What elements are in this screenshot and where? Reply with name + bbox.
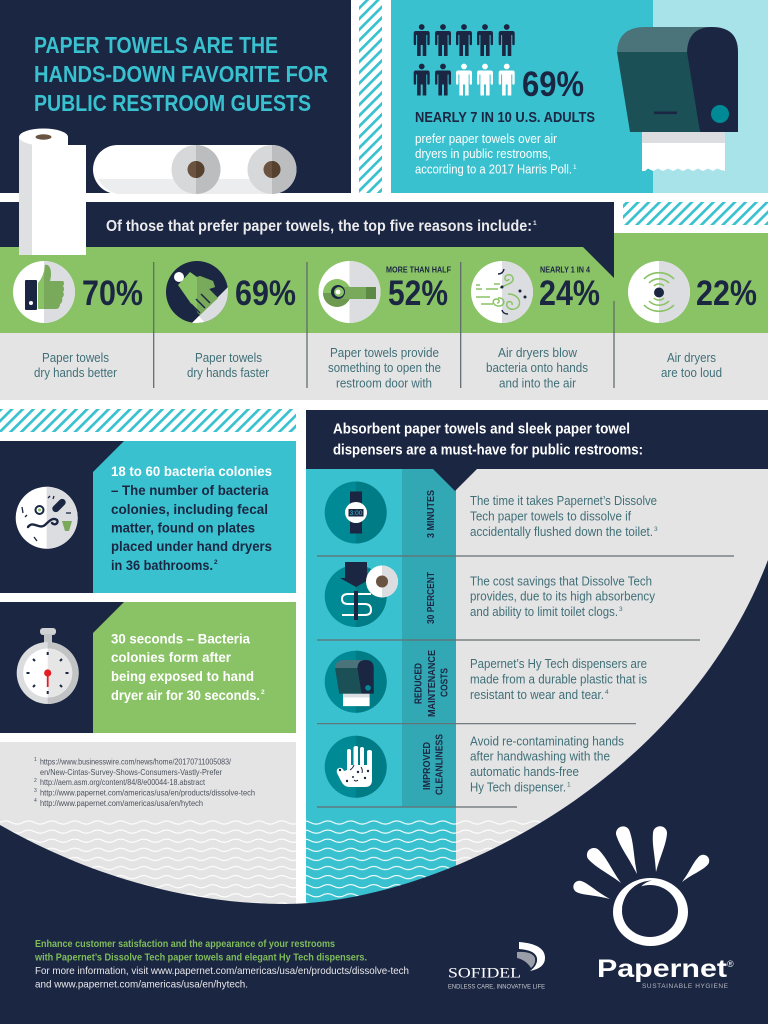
text block: sources: 3	[34, 788, 37, 794]
heading	[34, 32, 328, 116]
logo: Sofidel	[448, 942, 546, 990]
text block: Hy Tech dispenser.	[470, 780, 566, 794]
label: NEARLY 1 IN 4	[540, 265, 590, 275]
panel: thirty seconds	[0, 602, 296, 733]
text block: after handwashing with the	[470, 748, 610, 764]
logo: Papernet	[572, 824, 734, 990]
caption: and into the air	[499, 376, 577, 390]
caption	[328, 345, 441, 390]
reason 3: door handle	[318, 261, 451, 390]
text block	[470, 734, 624, 794]
text block: 1	[567, 782, 571, 788]
panel: product benefits	[306, 410, 768, 914]
heading: HANDS-DOWN FAVORITE FOR	[34, 61, 328, 87]
text block: Papernet’s Hy Tech dispensers are	[470, 656, 647, 671]
statistic: 22%: 22%	[696, 274, 757, 313]
text block: sources: http://www.papernet.com/americas/usa/en/hytech	[40, 798, 203, 808]
caption	[486, 345, 588, 390]
label	[421, 734, 446, 795]
caption: Air dryers blow	[498, 345, 577, 360]
text block: automatic hands-free	[470, 764, 579, 779]
icon: air and bacteria	[471, 261, 533, 323]
heading: PUBLIC RESTROOM GUESTS	[34, 90, 311, 116]
caption	[34, 350, 118, 380]
text block: sources: https://www.businesswire.com/news/home/20170711005083/	[40, 756, 231, 766]
text block: The cost savings that Dissolve Tech	[470, 574, 652, 588]
icon: thumbs up	[13, 261, 75, 323]
icon: people pictogram	[414, 24, 515, 96]
row: reduced maintenance costs	[325, 650, 647, 717]
caption: restroom door with	[336, 376, 432, 390]
statistic: 24%: 24%	[539, 274, 600, 313]
text block: resistant to wear and tear.	[470, 687, 604, 702]
icon: bacteria petri dish	[16, 487, 78, 549]
text block: 2	[214, 559, 218, 566]
label: MORE THAN HALF	[386, 265, 451, 275]
text block: provides, due to its high absorbency	[470, 589, 655, 604]
decorative stripe block	[623, 202, 768, 225]
caption: dry hands better	[34, 365, 118, 380]
text block: according to a 2017 Harris Poll.	[415, 162, 572, 176]
icon: toilet pipe and roll	[325, 562, 398, 627]
dividers	[154, 262, 614, 388]
panel: 69 percent statistic	[391, 0, 768, 193]
statistic: 69%: 69%	[522, 65, 584, 104]
text block: Tech paper towels to dissolve if	[470, 508, 631, 524]
panel: reasons heading banner	[0, 202, 614, 278]
caption: dry hands faster	[187, 365, 270, 380]
statistic: 52%: 52%	[388, 274, 448, 313]
text block: prefer paper towels over air	[415, 131, 558, 146]
text block: in 36 bathrooms.	[111, 558, 213, 574]
text block: 4	[605, 689, 609, 696]
text block: sources: en/New-Cintas-Survey-Shows-Consumers-Vastly-Prefer	[40, 767, 222, 777]
text block: dryers in public restrooms,	[415, 146, 551, 161]
icon: paper roll upright	[19, 128, 86, 255]
reason 1: dry better	[13, 261, 143, 380]
icon: wristwatch: 3:00	[350, 510, 363, 517]
caption: Paper towels provide	[330, 345, 439, 360]
text block	[470, 574, 655, 619]
text block: The time it takes Papernet’s Dissolve	[470, 493, 657, 508]
text block: accidentally flushed down the toilet.	[470, 524, 653, 539]
icon: hand with germs	[325, 736, 387, 798]
caption: something to open the	[328, 360, 441, 375]
text block: and ability to limit toilet clogs.	[470, 604, 618, 619]
text block: placed under hand dryers	[111, 539, 272, 555]
panel: navy footer curve	[0, 560, 768, 1024]
text block: matter, found on plates	[111, 520, 255, 536]
subheading: NEARLY 7 IN 10 U.S. ADULTS	[415, 109, 595, 126]
text block	[470, 493, 658, 539]
statistic: 69%: 69%	[235, 274, 296, 313]
text block: 3	[619, 606, 623, 613]
text block: sources: http://www.papernet.com/americas/usa/en/products/dissolve-tech	[40, 788, 255, 798]
panel: references	[0, 742, 296, 912]
logo: Sofidel: SOFIDEL	[448, 966, 521, 982]
text block: sources: 1	[34, 757, 37, 763]
text block: colonies form after	[111, 650, 231, 666]
icon: handshake	[166, 261, 228, 323]
text block: sources: http://aem.asm.org/content/84/8/e00044-18.abstract	[40, 777, 206, 787]
text block	[111, 632, 265, 704]
row: improved cleanliness	[325, 734, 624, 798]
footer text: and www.papernet.com/americas/usa/en/hytech.	[35, 978, 248, 990]
text block: colonies, including fecal	[111, 502, 268, 518]
heading: Of those that prefer paper towels, the top five reasons include:	[106, 218, 532, 235]
reason 2: dry faster	[166, 261, 296, 380]
logo: Papernet: ®	[727, 959, 734, 969]
icon: door handle	[318, 261, 380, 323]
panel: green statistic band	[0, 233, 768, 400]
footer text: with Papernet’s Dissolve Tech paper towels and elegant Hy Tech dispensers.	[34, 952, 367, 964]
label: CLEANLINESS	[434, 734, 446, 795]
label: IMPROVED	[421, 742, 433, 790]
caption	[661, 350, 722, 380]
label: 30 PERCENT	[425, 572, 437, 624]
text block: 30 seconds – Bacteria	[111, 632, 250, 648]
caption: Air dryers	[667, 350, 716, 365]
caption	[187, 350, 270, 380]
text block: Avoid re-contaminating hands	[470, 734, 624, 748]
text block: being exposed to hand	[111, 669, 254, 685]
text block: 1	[573, 164, 577, 171]
decorative stripe column	[359, 0, 382, 193]
panel: reasons heading banner: 1	[533, 220, 537, 227]
heading: PAPER TOWELS ARE THE	[34, 32, 278, 58]
icon: stopwatch	[17, 628, 79, 704]
reason 5: too loud	[628, 261, 757, 380]
icon: ring and drops	[572, 824, 712, 946]
text block	[111, 464, 272, 574]
panel: title block	[0, 0, 351, 193]
text block: sources: 4	[34, 798, 37, 804]
logo: Sofidel: ENDLESS CARE, INNOVATIVE LIFE	[448, 984, 546, 990]
statistic: 70%: 70%	[82, 274, 143, 313]
footer text: Enhance customer satisfaction and the appearance of your restrooms	[35, 938, 335, 950]
text block: 18 to 60 bacteria colonies	[111, 464, 272, 480]
caption: Paper towels	[195, 350, 262, 365]
panel: bacteria colonies	[0, 441, 296, 593]
text block	[415, 131, 577, 176]
logo: Papernet: SUSTAINABLE HYGIENE	[642, 983, 729, 990]
text block: sources	[34, 756, 255, 808]
text block: – The number of bacteria	[111, 483, 269, 499]
label: REDUCED	[413, 663, 425, 704]
icon: sound waves	[628, 261, 690, 323]
text block: 3	[654, 526, 658, 533]
caption: are too loud	[661, 365, 722, 380]
text block: sources: 2	[34, 778, 37, 784]
text block: dryer air for 30 seconds.	[111, 688, 260, 704]
heading banner: dispensers are a must-have for public restrooms:	[333, 442, 643, 458]
caption: bacteria onto hands	[486, 360, 588, 375]
label	[413, 650, 451, 717]
label: COSTS	[439, 668, 451, 697]
caption: Paper towels	[42, 350, 109, 365]
heading banner: Absorbent paper towels and sleek paper towel	[333, 420, 630, 438]
label: MAINTENANCE	[426, 650, 438, 717]
decorative stripe bar	[0, 409, 296, 432]
label: 3 MINUTES	[425, 490, 437, 538]
icon: paper roll horizontal	[93, 145, 296, 194]
logo: Papernet: Papernet	[597, 955, 728, 983]
footer text	[34, 938, 409, 990]
icon: mini dispenser	[325, 651, 387, 713]
text block	[470, 656, 647, 702]
text block: made from a durable plastic that is	[470, 672, 647, 686]
icon: paper towel dispenser	[617, 27, 738, 171]
row: 30 percent	[325, 562, 655, 627]
heading banner	[306, 410, 768, 491]
row: 3 minutes	[325, 482, 658, 544]
icon: wristwatch	[325, 482, 387, 544]
reason 4: blown bacteria	[471, 261, 600, 390]
footer text: For more information, visit www.papernet.com/americas/usa/en/products/dissolve-tech	[35, 965, 409, 977]
text block: 2	[261, 689, 265, 696]
